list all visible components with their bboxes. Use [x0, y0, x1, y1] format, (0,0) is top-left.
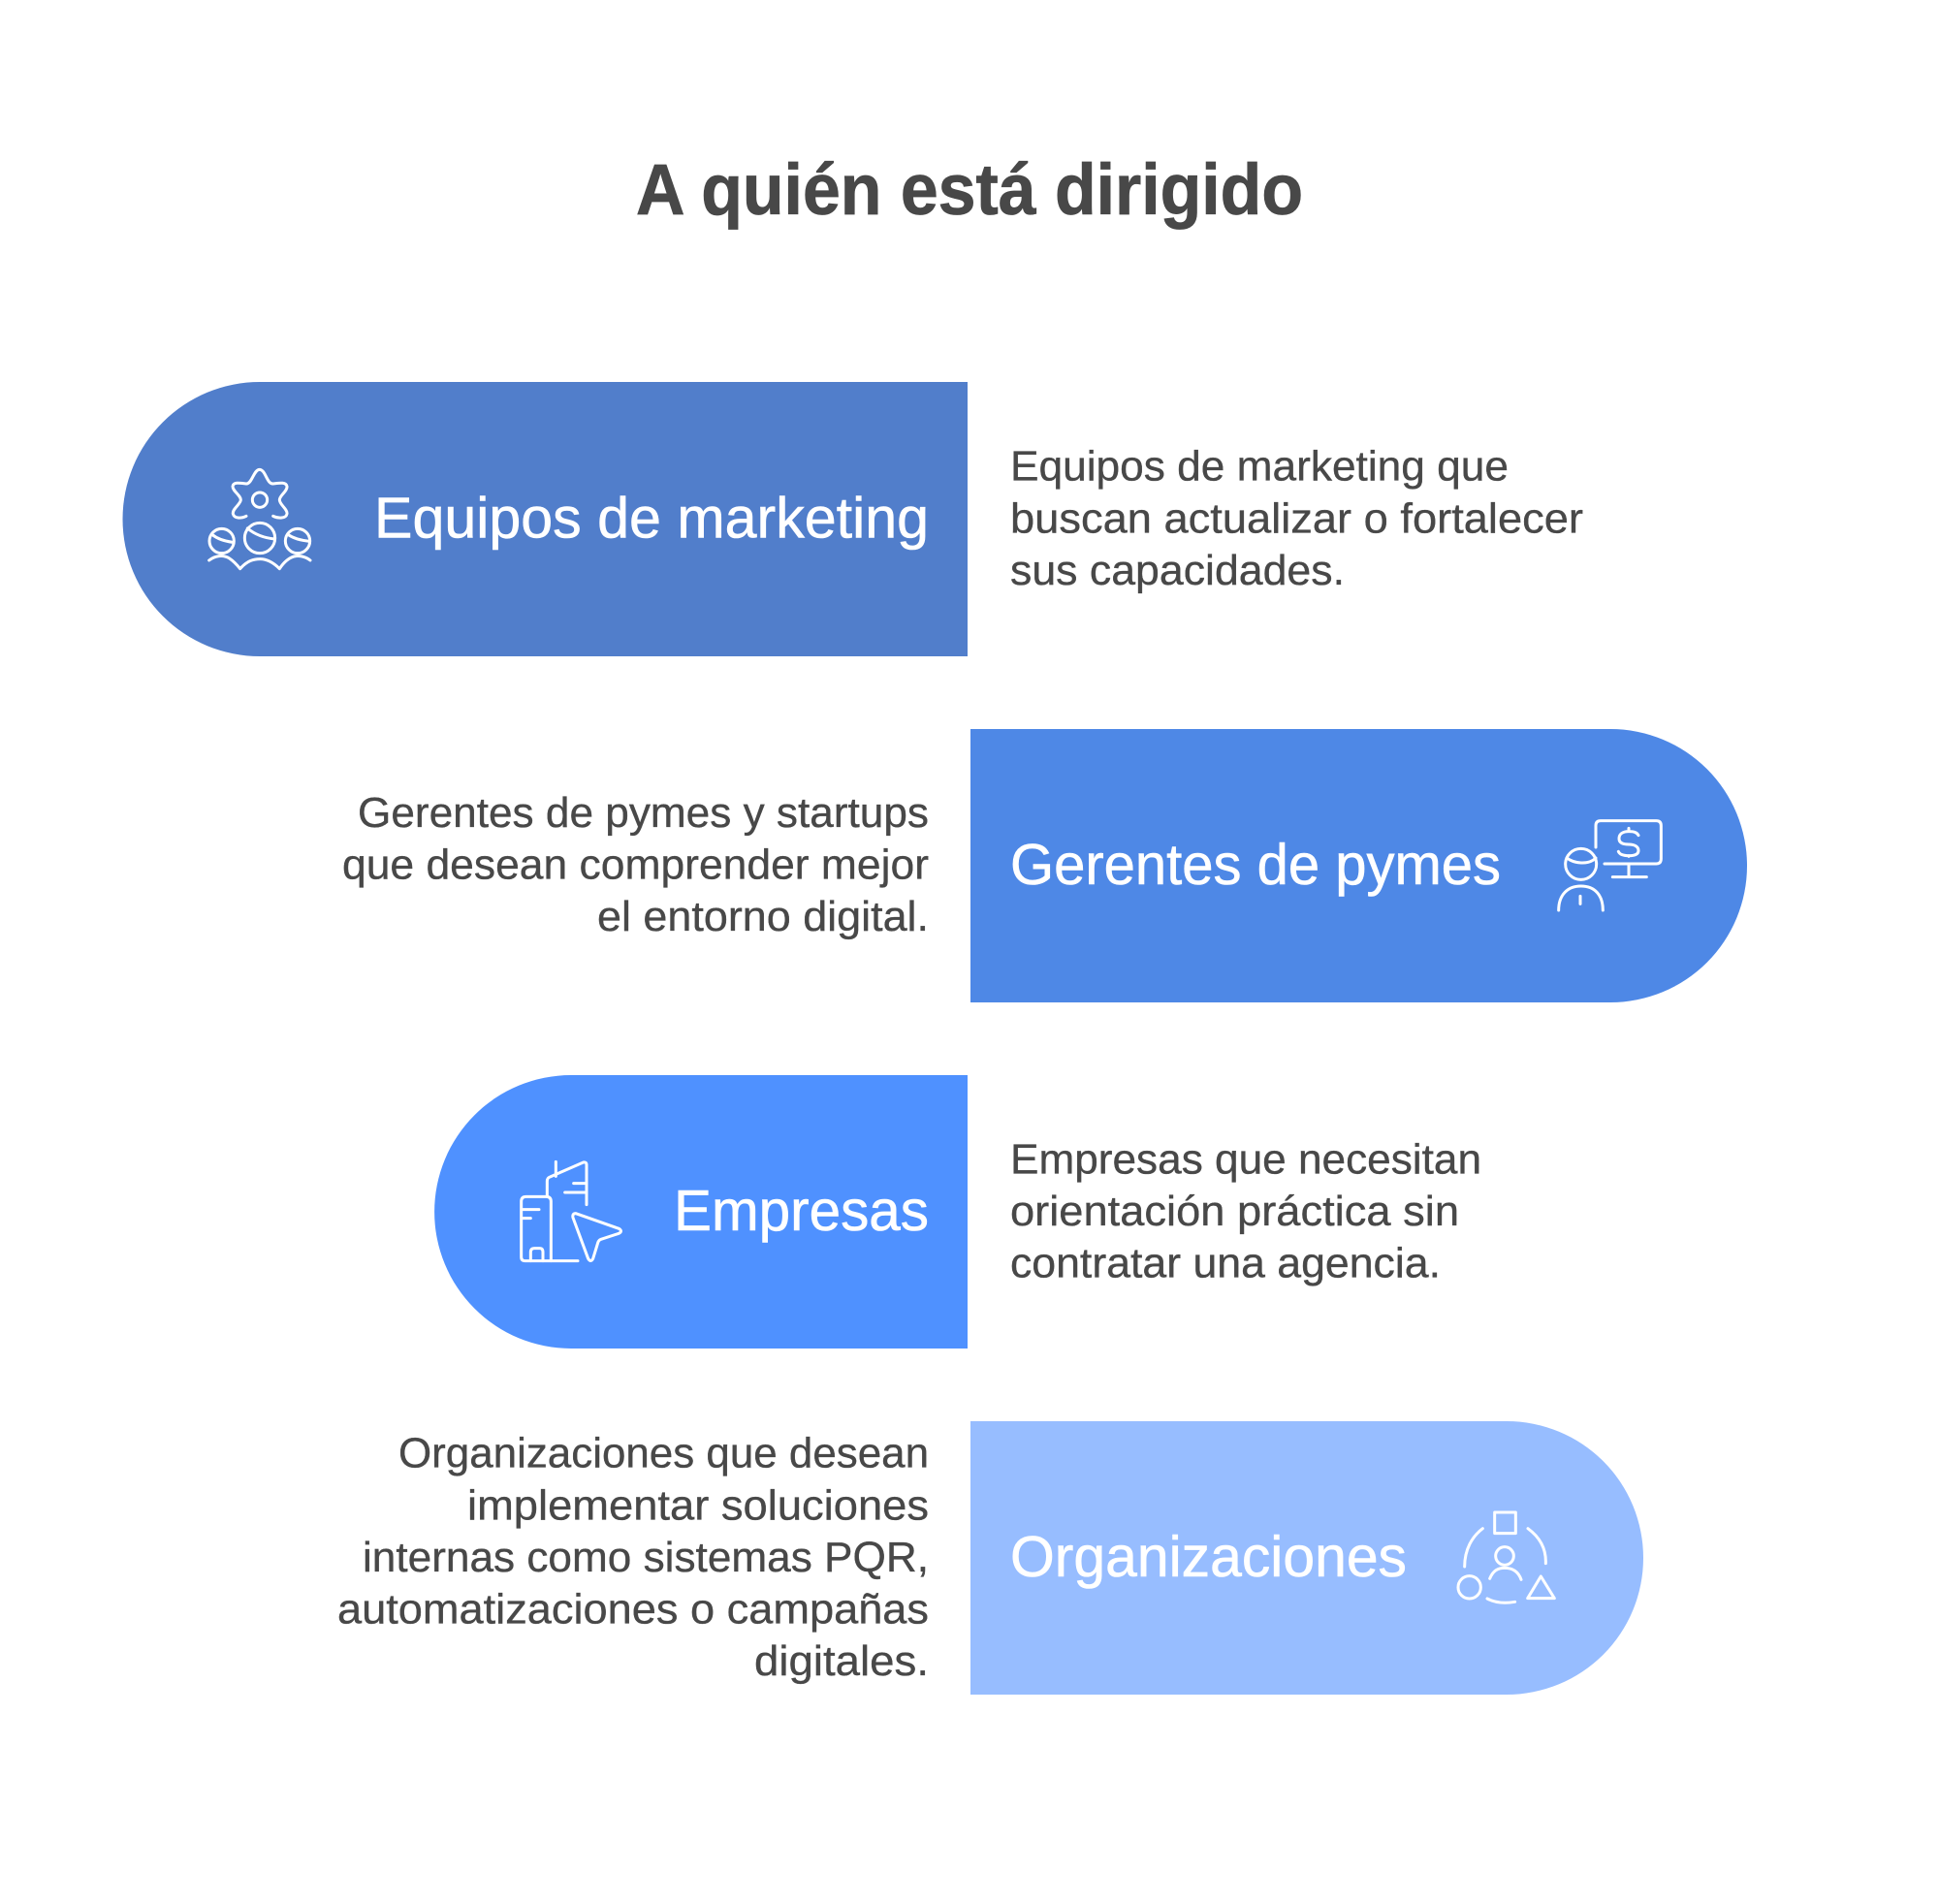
- panel: Empresas: [434, 1075, 968, 1349]
- text block: Equipos de marketing: [1010, 443, 1583, 594]
- text block: Equipos de marketing: sus capacidades.: [1010, 547, 1345, 594]
- text block: Organizaciones: internas como sistemas PQR,: [363, 1534, 929, 1581]
- pill shape 1: [122, 382, 968, 656]
- label: Organizaciones: [1010, 1525, 1407, 1589]
- pill shape 4: [970, 1421, 1643, 1695]
- label: Equipos de marketing: [374, 487, 929, 551]
- text block: Gerentes de pymes: que desean comprender mejor: [342, 841, 929, 888]
- pill shape 2: [970, 729, 1747, 1002]
- text block: Empresas: contratar una agencia.: [1010, 1239, 1441, 1286]
- pill shape 3: [434, 1075, 968, 1349]
- panel: Equipos de marketing: [122, 382, 968, 656]
- label: Empresas: [674, 1179, 929, 1243]
- label: Gerentes de pymes: [1010, 833, 1501, 897]
- text block: Gerentes de pymes: el entorno digital.: [597, 893, 929, 940]
- panel: Organizaciones: [970, 1421, 1643, 1695]
- text block: Organizaciones: implementar soluciones: [467, 1481, 929, 1529]
- icon: person with shapes: [1458, 1512, 1554, 1603]
- text block: Organizaciones: [337, 1430, 929, 1685]
- icon: manager and dollar monitor: [1559, 821, 1661, 910]
- text block: Gerentes de pymes: [342, 789, 929, 940]
- text block: Empresas: [1010, 1135, 1481, 1286]
- panel: Gerentes de pymes: [970, 729, 1747, 1002]
- text block: Gerentes de pymes: Gerentes de pymes y startups: [358, 789, 929, 837]
- icon: gear and team: [209, 469, 310, 569]
- text block: Equipos de marketing: buscan actualizar o fortalecer: [1010, 494, 1583, 542]
- text block: Empresas: orientación práctica sin: [1010, 1188, 1459, 1235]
- text block: Empresas: Empresas que necesitan: [1010, 1135, 1481, 1183]
- text block: Organizaciones: Organizaciones que desean: [398, 1430, 929, 1477]
- icon: buildings and cursor: [522, 1161, 620, 1261]
- title: A quién está dirigido: [636, 149, 1303, 230]
- text block: Organizaciones: automatizaciones o campañas: [337, 1585, 929, 1633]
- text block: Equipos de marketing: Equipos de marketing que: [1010, 443, 1509, 491]
- text block: Organizaciones: digitales.: [754, 1637, 929, 1685]
